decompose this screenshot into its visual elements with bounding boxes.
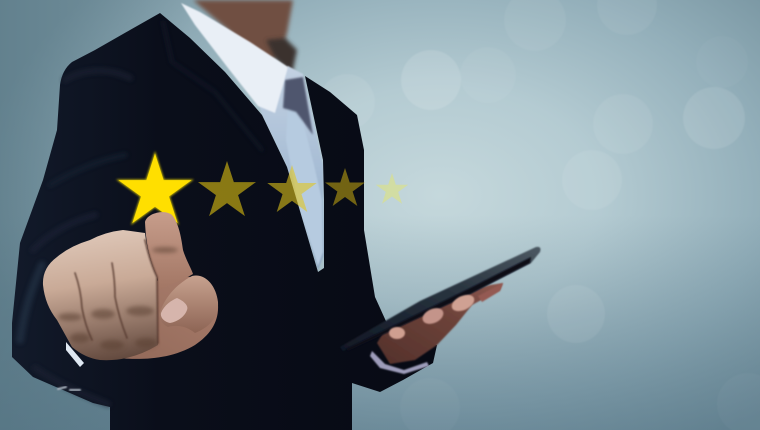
jacket highlights and folds	[20, 22, 262, 404]
tie	[283, 77, 323, 266]
star 3	[267, 165, 317, 212]
rating stars	[116, 151, 408, 225]
shirt	[258, 66, 324, 270]
finger separators	[75, 240, 158, 343]
star 1 bright with glow	[116, 151, 194, 225]
fingers block	[43, 230, 158, 360]
shadow under chin	[266, 38, 297, 74]
bokeh light circles	[319, 0, 760, 430]
neck	[193, 0, 293, 66]
knuckle shadows	[58, 247, 178, 350]
jacket sleeve buttons	[58, 387, 80, 390]
thumbnail	[161, 298, 187, 323]
hand holding tablet, palm behind fingers	[377, 283, 503, 364]
tablet	[340, 247, 540, 351]
star 5	[376, 173, 408, 204]
suit jacket body	[12, 13, 437, 430]
star 4	[325, 168, 365, 206]
shirt cuff, pointing hand	[66, 342, 84, 367]
pointing hand	[43, 212, 218, 360]
thumb	[159, 276, 218, 333]
palm and base	[72, 275, 218, 359]
shirt cuff, tablet hand	[370, 351, 429, 374]
white shirt collar	[181, 3, 288, 113]
index finger	[145, 212, 193, 290]
star 2	[198, 161, 256, 216]
fingertips on tablet	[389, 283, 503, 339]
